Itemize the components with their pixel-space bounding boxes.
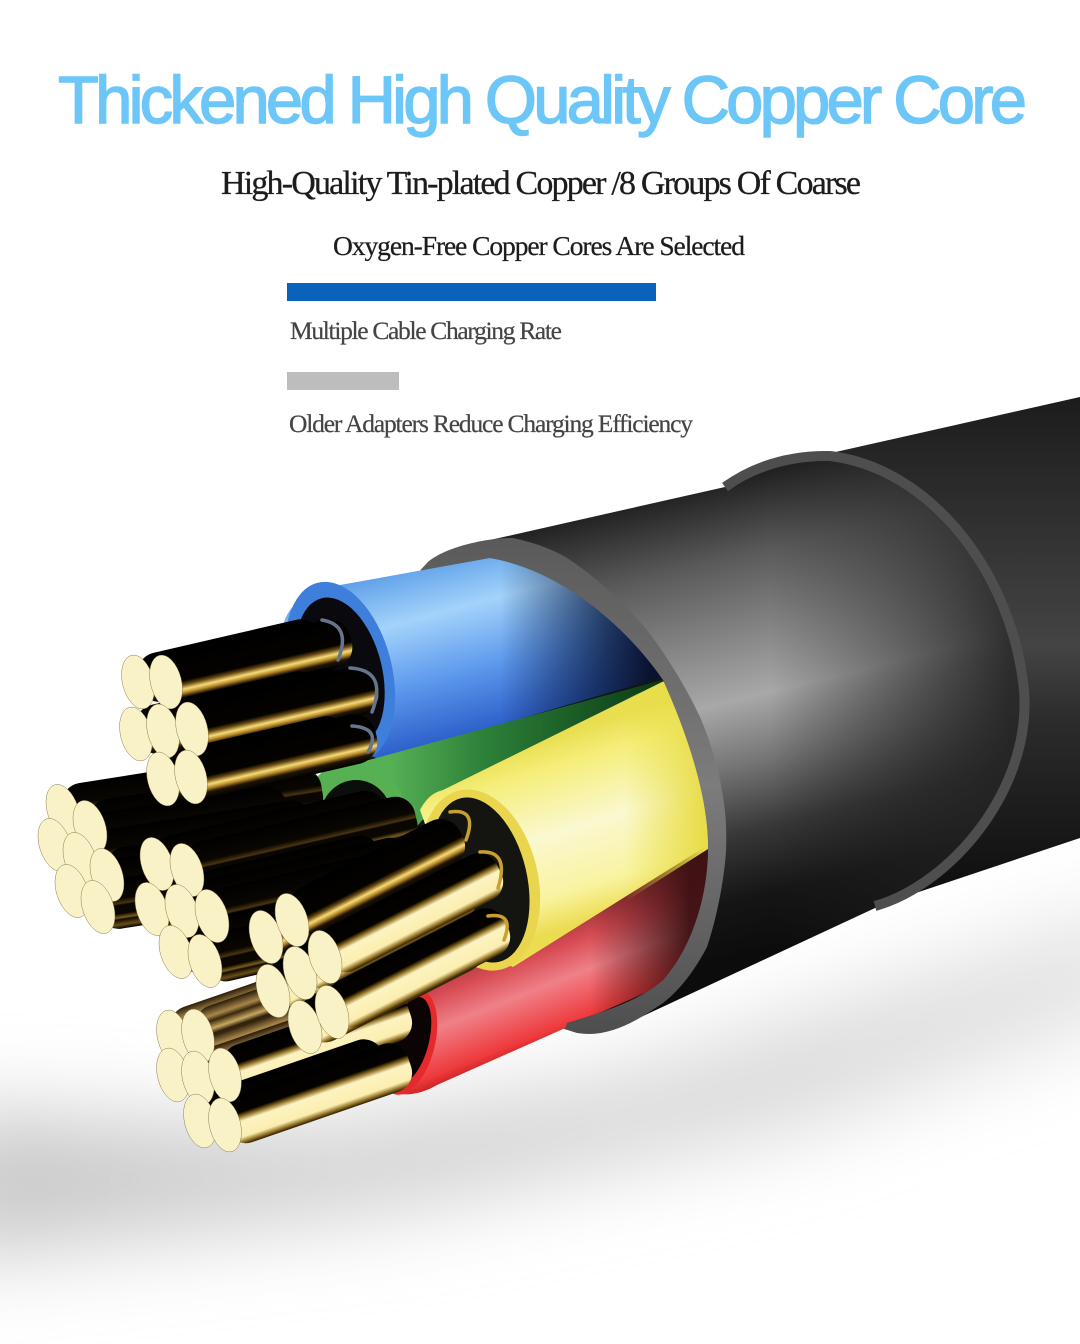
gray gap between wires xyxy=(284,768,322,800)
green wire xyxy=(318,680,668,826)
insulated wires xyxy=(267,558,730,1101)
middle sheath xyxy=(427,453,1029,1030)
yellow wire opening xyxy=(438,798,530,962)
blue wire opening xyxy=(300,598,385,732)
sheath mouth rim xyxy=(300,538,726,1034)
gray comparison bar xyxy=(287,372,399,390)
copper strands: green wire left group xyxy=(32,750,343,938)
yellow wire rim xyxy=(426,789,540,971)
copper strands: yellow wire group xyxy=(243,811,517,1058)
blue wire rim xyxy=(288,582,395,758)
green wire opening xyxy=(324,780,387,800)
red wire xyxy=(392,849,708,1095)
gray bar label: Older Adapters Reduce Charging Efficiency xyxy=(289,409,693,438)
copper strands: red wire group xyxy=(151,942,418,1155)
subtitle line 1: High-Quality Tin-plated Copper /8 Groups Of Coarse xyxy=(221,165,861,202)
jacket ring edge xyxy=(725,456,1025,906)
blue bar label: Multiple Cable Charging Rate xyxy=(290,316,562,345)
blue comparison bar xyxy=(287,283,656,301)
cable mouth interior xyxy=(300,558,708,1060)
green wire rim xyxy=(310,766,406,864)
floor shadow xyxy=(0,900,1080,1260)
subtitle line 2: Oxygen-Free Copper Cores Are Selected xyxy=(333,230,745,261)
yellow wire xyxy=(420,682,708,971)
cable illustration xyxy=(32,397,1080,1155)
red wire rim xyxy=(392,993,438,1095)
outer cable jacket xyxy=(800,397,1080,915)
copper strands: blue wire group xyxy=(114,615,383,809)
blue wire xyxy=(284,558,662,758)
title: Thickened High Quality Copper Core xyxy=(58,63,1027,138)
red wire opening xyxy=(392,997,432,1078)
strand insulation arcs xyxy=(322,620,507,940)
copper strands: green wire right group xyxy=(129,787,447,992)
